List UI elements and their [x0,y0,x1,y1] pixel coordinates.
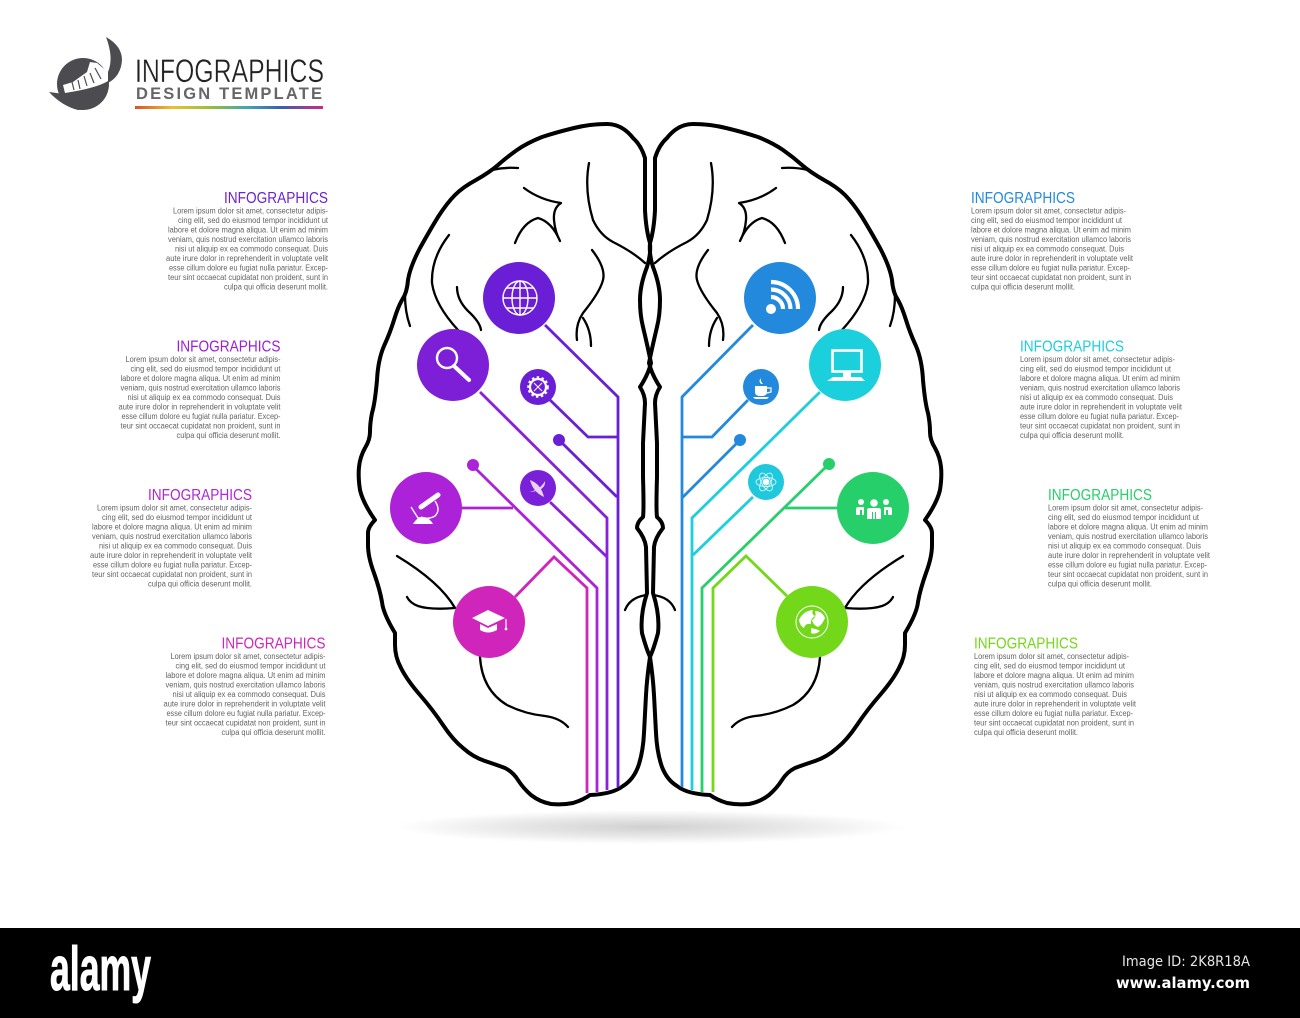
text block: left 2: Lorem ipsum dolor sit amet, consectetur adipis- [126,355,281,364]
text block: right 2: labore et dolore magna aliqua. Ut enim ad minim [1020,374,1180,383]
text block: right 1: culpa qui officia deserunt mollit. [971,282,1075,292]
icon: team [837,472,909,544]
text block: left 3: aute irure dolor in reprehenderit in voluptate velit [90,551,253,560]
brain: right hemisphere [649,124,941,804]
logo title: INFOGRAPHICS [135,53,324,89]
footer bar [0,928,1300,1018]
text block: left 4: cing elit, sed do eiusmod tempor incididunt ut [176,662,326,670]
text block: right 1: aute irure dolor in reprehenderit in voluptate velit [971,254,1134,263]
text block: left 2: aute irure dolor in reprehenderit in voluptate velit [118,402,281,412]
text block: left 1: INFOGRAPHICS [224,190,328,207]
ground shadow [395,810,905,844]
text block: right 3: esse cillum dolore eu fugiat nulla pariatur. Excep- [1048,560,1207,570]
text block: left 3: culpa qui officia deserunt mollit. [148,580,252,588]
text block: left 3: labore et dolore magna aliqua. Ut enim ad minim [92,522,252,532]
text block: left 1: esse cillum dolore eu fugiat nulla pariatur. Excep- [169,264,328,272]
text block: right 2: INFOGRAPHICS [1020,338,1124,356]
text block: left 4: nisi ut aliquip ex ea commodo consequat. Duis [172,690,326,699]
text block: left 1: aute irure dolor in reprehenderit in voluptate velit [166,254,329,263]
text block: right 3: nisi ut aliquip ex ea commodo consequat. Duis [1048,542,1201,550]
text block: left 3: veniam, quis nostrud exercitation ullamco laboris [92,532,252,541]
text block: right 4: Lorem ipsum dolor sit amet, consectetur adipis- [974,652,1129,661]
text block: right 4: esse cillum dolore eu fugiat nulla pariatur. Excep- [974,709,1133,718]
text block: right 3: labore et dolore magna aliqua. Ut enim ad minim [1048,522,1208,532]
text block: right 1: teur sint occaecat cupidatat non proident, sunt in [971,273,1131,282]
text block: right 4: nisi ut aliquip ex ea commodo consequat. Duis [974,690,1127,699]
text block: right 3: aute irure dolor in reprehenderit in voluptate velit [1048,551,1211,560]
text block: right 4: teur sint occaecat cupidatat non proident, sunt in [974,718,1134,728]
text block: right 3: Lorem ipsum dolor sit amet, consectetur adipis- [1048,504,1203,512]
text block: right 4: cing elit, sed do eiusmod tempor incididunt ut [974,662,1126,670]
icon: computer [809,329,881,401]
text block: right 2: nisi ut aliquip ex ea commodo consequat. Duis [1020,393,1173,402]
text block: right 1: cing elit, sed do eiusmod tempor incididunt ut [971,216,1123,225]
text block: right 3: teur sint occaecat cupidatat non proident, sunt in [1048,570,1208,579]
text block: left 4: esse cillum dolore eu fugiat nulla pariatur. Excep- [166,709,326,718]
text block: left 2: cing elit, sed do eiusmod tempor incididunt ut [130,364,281,374]
text block: left 3: INFOGRAPHICS [148,487,252,504]
logo icon [49,37,122,110]
text block: left 2: esse cillum dolore eu fugiat nulla pariatur. Excep- [122,412,281,421]
text block: left 2: teur sint occaecat cupidatat non proident, sunt in [120,422,280,430]
text block: left 1: cing elit, sed do eiusmod tempor incididunt ut [178,216,329,225]
icon: globe [483,262,555,334]
brain: left hemisphere [359,124,651,804]
text block: left 3: nisi ut aliquip ex ea commodo consequat. Duis [99,542,252,550]
text block: left 1 [166,190,329,292]
text block: right 1: INFOGRAPHICS [971,190,1075,207]
circuit lines: left [462,325,618,793]
text block: right 3: cing elit, sed do eiusmod tempor incididunt ut [1048,513,1200,522]
text block: right 1: labore et dolore magna aliqua. Ut enim ad minim [971,226,1131,234]
text block: right 2: veniam, quis nostrud exercitation ullamco laboris [1020,384,1180,392]
text block: left 4 [164,636,326,737]
text block: right 2: culpa qui officia deserunt mollit. [1020,431,1124,440]
text block: left 4: Lorem ipsum dolor sit amet, consectetur adipis- [170,652,326,661]
text block: left 2: veniam, quis nostrud exercitation ullamco laboris [120,384,280,392]
footer url: www.alamy.com [1116,974,1250,992]
text block: right 1: nisi ut aliquip ex ea commodo consequat. Duis [971,244,1124,254]
text block: left 2 [118,338,281,440]
text block: left 4: labore et dolore magna aliqua. Ut enim ad minim [166,671,326,680]
text block: right 1: Lorem ipsum dolor sit amet, consectetur adipis- [971,206,1126,216]
icon: atom [748,464,784,500]
text block: left 1: nisi ut aliquip ex ea commodo consequat. Duis [175,244,328,254]
icon: rss [744,262,816,334]
text block: right 3: veniam, quis nostrud exercitation ullamco laboris [1048,532,1208,541]
text block: left 2: culpa qui officia deserunt mollit. [176,431,280,440]
text block: left 4: teur sint occaecat cupidatat non proident, sunt in [166,718,326,728]
text block: right 4: aute irure dolor in reprehenderit in voluptate velit [974,700,1137,708]
text block: left 3 [90,487,253,588]
text block: right 4: veniam, quis nostrud exercitation ullamco laboris [974,680,1134,690]
icon: gear [520,369,556,405]
icon: microscope [390,472,462,544]
text block: left 3: Lorem ipsum dolor sit amet, consectetur adipis- [97,504,252,512]
text block: right 1: esse cillum dolore eu fugiat nulla pariatur. Excep- [971,264,1130,272]
text block: right 3 [1048,487,1211,588]
logo subtitle: DESIGN TEMPLATE [136,85,322,103]
text block: left 2: nisi ut aliquip ex ea commodo consequat. Duis [128,393,280,402]
circuit lines: right [682,325,838,792]
text block: right 3: INFOGRAPHICS [1048,487,1152,504]
text block: left 4: veniam, quis nostrud exercitation ullamco laboris [166,680,326,690]
footer brand: alamy [50,935,151,1004]
text block: right 4 [974,636,1137,737]
text block: right 1 [971,190,1134,292]
text block: right 4: INFOGRAPHICS [974,636,1078,652]
text block: right 4: culpa qui officia deserunt mollit. [974,728,1078,737]
icon: dna [520,470,556,506]
text block: left 1: veniam, quis nostrud exercitation ullamco laboris [168,235,328,244]
footer image id: Image ID: 2K8R18A [1122,954,1250,970]
text block: left 4: culpa qui officia deserunt mollit. [222,728,326,737]
text block: left 3: teur sint occaecat cupidatat non proident, sunt in [92,570,252,579]
text block: left 4: aute irure dolor in reprehenderit in voluptate velit [164,700,326,708]
icon: earth [776,586,848,658]
icon: graduation cap [453,586,525,658]
rainbow bar [135,106,323,109]
text block: right 2: teur sint occaecat cupidatat non proident, sunt in [1020,422,1180,430]
text block: right 2: cing elit, sed do eiusmod tempor incididunt ut [1020,364,1172,374]
text block: right 2: Lorem ipsum dolor sit amet, consectetur adipis- [1020,355,1175,364]
text block: left 1: Lorem ipsum dolor sit amet, consectetur adipis- [173,206,328,216]
text block: left 3: cing elit, sed do eiusmod tempor incididunt ut [102,513,253,522]
text block: left 1: labore et dolore magna aliqua. Ut enim ad minim [168,226,328,234]
text block: left 2: labore et dolore magna aliqua. Ut enim ad minim [120,374,281,383]
text block: right 2 [1020,338,1183,440]
text block: left 2: INFOGRAPHICS [176,338,280,356]
icon: magnifier [417,329,489,401]
text block: left 1: culpa qui officia deserunt mollit. [224,282,328,292]
text block: right 3: culpa qui officia deserunt mollit. [1048,580,1152,588]
icon: coffee cup [743,369,779,405]
text block: left 4: INFOGRAPHICS [222,636,326,652]
text block: right 4: labore et dolore magna aliqua. Ut enim ad minim [974,671,1134,680]
text block: right 1: veniam, quis nostrud exercitation ullamco laboris [971,235,1131,244]
text block: right 2: aute irure dolor in reprehenderit in voluptate velit [1020,402,1183,412]
text block: left 1: teur sint occaecat cupidatat non proident, sunt in [168,273,328,282]
text block: right 2: esse cillum dolore eu fugiat nulla pariatur. Excep- [1020,412,1179,421]
text block: left 3: esse cillum dolore eu fugiat nulla pariatur. Excep- [93,560,252,570]
